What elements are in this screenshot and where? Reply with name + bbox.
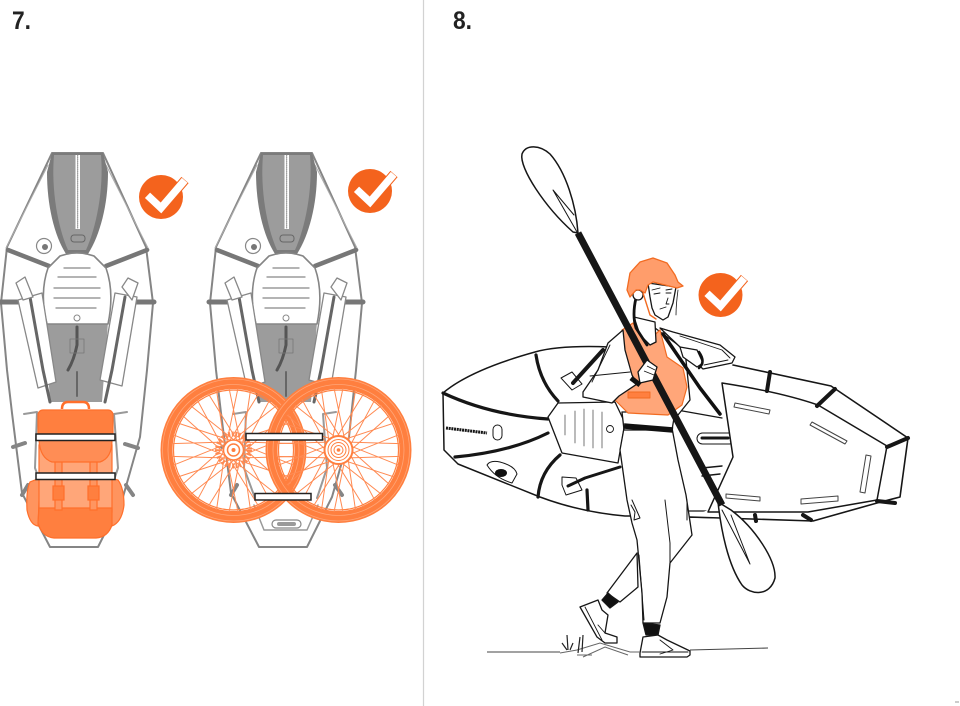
buckles bbox=[561, 372, 582, 495]
right hand bbox=[680, 347, 703, 367]
legs bbox=[607, 553, 638, 602]
divider between panels bbox=[422, 0, 424, 706]
ankle cuffs bbox=[602, 593, 660, 635]
heading: step 7: 7. bbox=[12, 7, 31, 35]
handle patches bbox=[726, 403, 871, 504]
lower blade bbox=[718, 502, 775, 592]
raft middle section behind figure bbox=[676, 410, 735, 517]
waist and belt bbox=[622, 412, 675, 430]
upper blade bbox=[522, 147, 578, 233]
ground and grass bbox=[487, 635, 768, 657]
braid bbox=[634, 298, 647, 345]
paddle bbox=[522, 147, 775, 592]
vest bbox=[615, 323, 687, 415]
jacket left sleeve bbox=[583, 330, 637, 403]
corner mark bbox=[955, 701, 959, 703]
tie-down straps bbox=[246, 434, 322, 500]
wheel: left bbox=[162, 379, 304, 521]
jacket right sleeve bbox=[660, 328, 735, 369]
jacket chest bbox=[650, 328, 690, 415]
wheel: right bbox=[268, 379, 410, 521]
raft seat section bbox=[548, 402, 625, 463]
heading: step 8: 8. bbox=[453, 7, 472, 35]
chin strap bbox=[643, 293, 656, 319]
backpack top bag bbox=[38, 402, 113, 462]
packraft carried under arm bbox=[443, 347, 908, 521]
raft with bicycle wheels bbox=[162, 153, 410, 547]
shoes bbox=[580, 600, 617, 643]
check mark: raft with backpack bbox=[139, 175, 185, 219]
check mark: paddler bbox=[698, 273, 744, 317]
raft rear section bbox=[443, 347, 640, 516]
collar and neck bbox=[634, 317, 656, 345]
check mark: raft with wheels bbox=[348, 169, 394, 213]
left hand gripping paddle bbox=[631, 360, 657, 385]
face bbox=[648, 283, 676, 320]
carry strap bbox=[663, 334, 720, 414]
backpack lower body bbox=[27, 445, 124, 538]
tie-down straps bbox=[36, 434, 115, 480]
paddler figure bbox=[580, 258, 735, 657]
shaft bbox=[578, 233, 722, 505]
raft bow section bbox=[690, 365, 908, 521]
raft with backpack bbox=[0, 153, 154, 547]
helmet bbox=[627, 258, 683, 297]
